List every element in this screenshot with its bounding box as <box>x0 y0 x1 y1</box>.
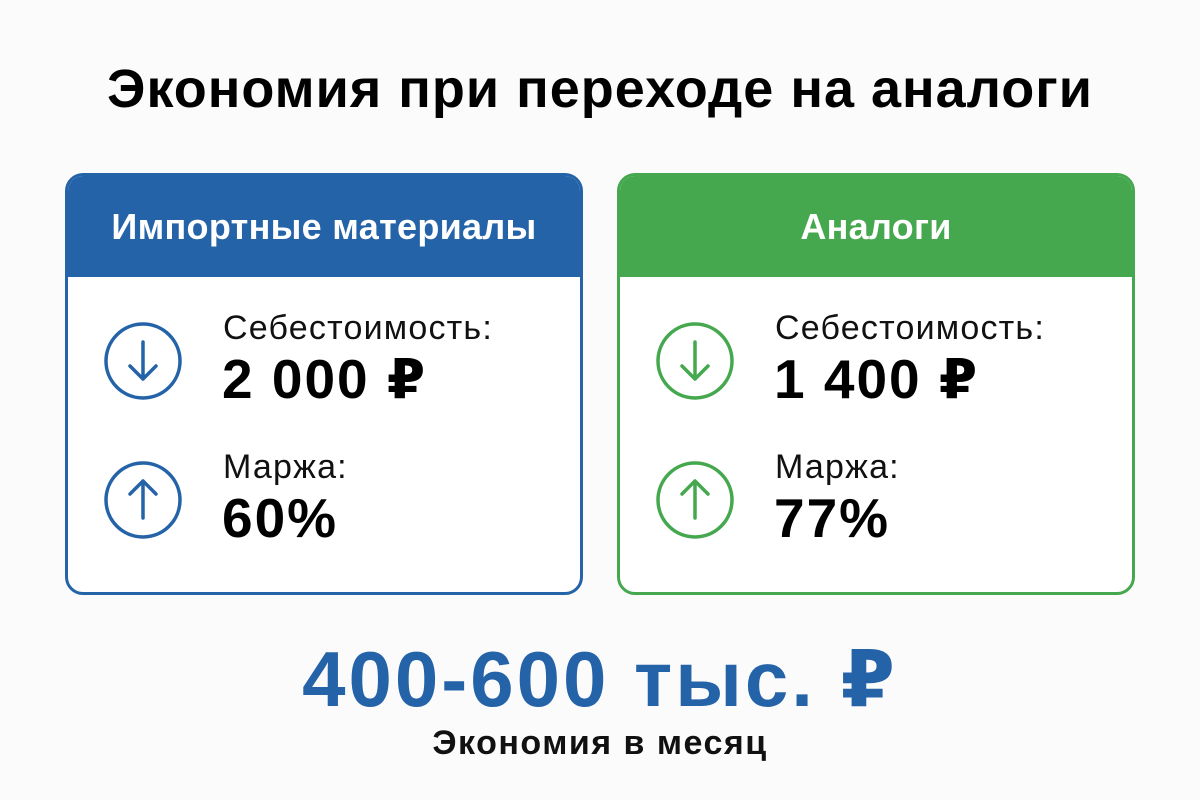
icon: up arrow green <box>656 461 734 539</box>
row: cost analogs <box>656 309 1045 410</box>
icon: up arrow <box>104 461 182 539</box>
row: cost analogs: Себестоимость: <box>775 309 1045 347</box>
savings caption: Экономия в месяц <box>432 724 768 762</box>
icon: down arrow green <box>656 322 734 400</box>
panel: analogs <box>617 173 1135 595</box>
header: imported <box>68 176 580 277</box>
row: margin analogs: Маржа: <box>775 448 900 486</box>
row: cost imported <box>104 309 493 410</box>
savings figure: 400-600 тыс. ₽ <box>302 635 898 723</box>
title: Экономия при переходе на аналоги <box>107 59 1093 119</box>
icon: down arrow <box>104 322 182 400</box>
header: imported: Импортные материалы <box>111 206 537 246</box>
panel: imported <box>65 173 583 595</box>
row: cost imported: Себестоимость: <box>223 309 493 347</box>
header: analogs <box>620 176 1132 277</box>
header: analogs: Аналоги <box>800 206 952 246</box>
row: margin analogs <box>656 448 900 549</box>
row: margin imported: Маржа: <box>223 448 348 486</box>
row: margin imported: 60% <box>222 487 338 549</box>
row: margin analogs: 77% <box>774 487 890 549</box>
row: cost imported: 2 000 ₽ <box>222 348 427 410</box>
row: cost analogs: 1 400 ₽ <box>774 348 979 410</box>
row: margin imported <box>104 448 348 549</box>
